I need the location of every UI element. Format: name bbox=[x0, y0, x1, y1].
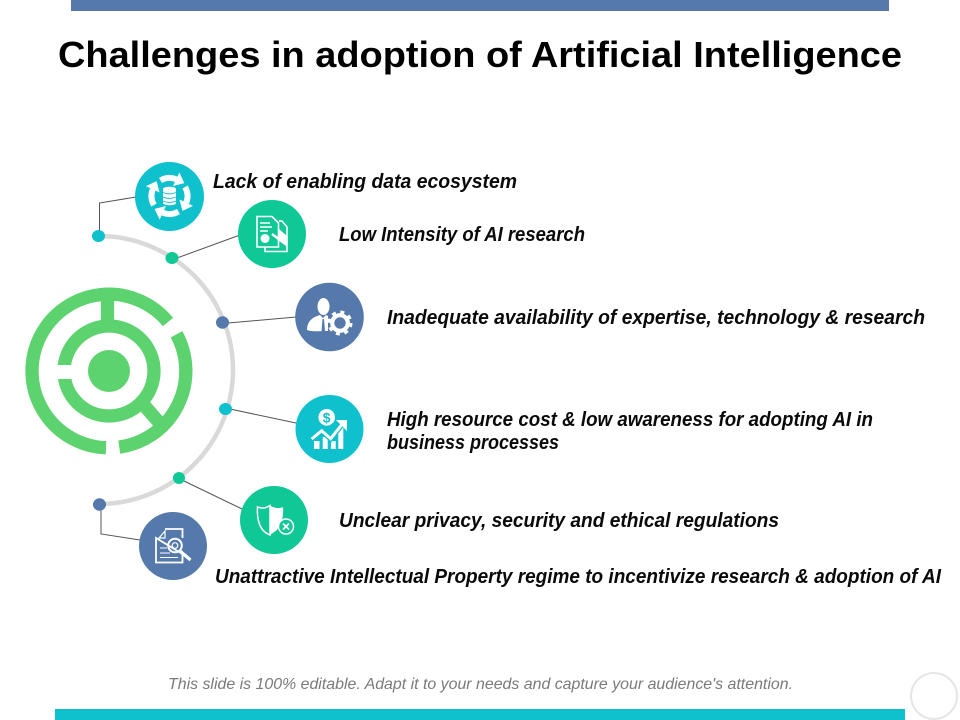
text: data ecosystem: Lack of enabling data ecosystem bbox=[213, 171, 517, 193]
grey semicircular arc bbox=[99, 236, 233, 504]
title: Challenges in adoption of Artificial Intelligence bbox=[58, 34, 902, 75]
text: expertise: Inadequate availability of expertise, technology & research bbox=[387, 307, 925, 329]
icon: dollar and growth chart: $ bbox=[323, 410, 331, 426]
connector: AI research bbox=[166, 235, 240, 264]
icon: document with magnifier bbox=[139, 512, 207, 580]
maze icon bbox=[32, 294, 186, 448]
text: intellectual property: Unattractive Intellectual Property regime to incentivize research & adoption of AI bbox=[215, 566, 941, 588]
text: resource cost bbox=[387, 409, 873, 454]
icon: shield with cross bbox=[240, 486, 308, 554]
bottom accent bar bbox=[55, 709, 905, 720]
icon: documents with pie chart bbox=[238, 200, 306, 268]
text: AI research: Low Intensity of AI research bbox=[339, 224, 585, 246]
connector: privacy bbox=[173, 472, 242, 509]
connector: resource cost bbox=[219, 403, 296, 423]
text: resource cost: business processes bbox=[387, 432, 559, 454]
footer note: This slide is 100% editable. Adapt it to your needs and capture your audience's attention. bbox=[168, 676, 793, 693]
icon: database with cycle arrows bbox=[135, 162, 204, 231]
text: resource cost: High resource cost & low awareness for adopting AI in bbox=[387, 409, 873, 431]
icon: person with gear bbox=[295, 283, 364, 351]
connector: expertise bbox=[216, 316, 296, 329]
top accent bar bbox=[71, 0, 889, 11]
icon: dollar and growth chart bbox=[296, 395, 364, 463]
connector: data ecosystem bbox=[92, 197, 136, 242]
page number circle bbox=[911, 673, 957, 719]
connector: intellectual property bbox=[93, 498, 140, 540]
text: privacy: Unclear privacy, security and ethical regulations bbox=[339, 510, 779, 532]
